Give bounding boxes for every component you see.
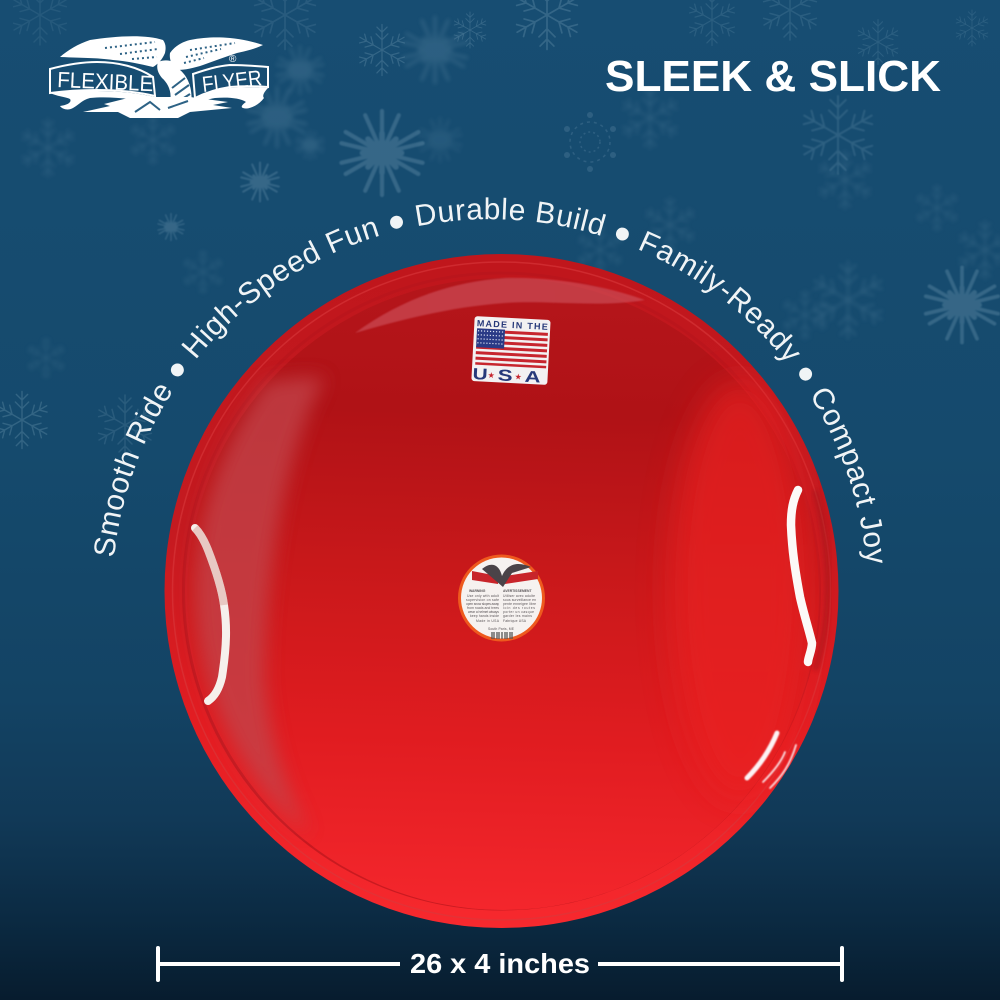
label fine print: wear a helmet always	[468, 610, 499, 614]
right bright shading	[670, 380, 810, 800]
lightning and mountain base	[83, 97, 232, 118]
body stripes	[172, 78, 190, 103]
logo: Flexible Flyer eagle	[50, 36, 268, 118]
sled disc	[164, 254, 838, 928]
base detail	[135, 101, 188, 112]
label fine print: AVERTISSEMENT	[503, 589, 533, 593]
USA lettering: ★	[514, 372, 522, 382]
left rope handle	[195, 528, 226, 701]
USA lettering: A	[524, 369, 542, 387]
label fine print: supervision on safe	[466, 598, 499, 602]
label fine print: garder les mains	[503, 614, 532, 618]
flag	[475, 328, 548, 368]
title: SLEEK & SLICK	[605, 52, 941, 101]
label fine print: Fabrique USA	[503, 619, 527, 623]
warning label	[458, 554, 545, 642]
eagle wings	[60, 36, 263, 70]
upper sheen band	[355, 278, 645, 333]
eagle body	[157, 60, 192, 112]
right banner tail	[190, 87, 268, 109]
made in the USA sticker	[471, 316, 551, 387]
label fine print: keep hands inside	[470, 614, 499, 618]
label fine print: loin des routes	[503, 606, 535, 610]
label fine print: Utiliser avec adulte	[503, 594, 535, 598]
eagle feather speckle	[105, 42, 235, 63]
label fine print: Made in USA	[476, 619, 500, 623]
left banner	[50, 62, 155, 96]
right rim shadow	[815, 490, 828, 670]
lower right glints	[747, 733, 796, 788]
snowflake pattern	[0, 0, 1000, 455]
label fine print: from roads and trees	[467, 606, 499, 610]
label fine print: porter un casque	[503, 610, 534, 614]
label banner	[472, 564, 538, 587]
left banner tail	[50, 91, 157, 109]
registered mark: ®	[229, 54, 237, 65]
sticker heading: MADE IN THE	[477, 318, 548, 332]
right rope handle	[791, 490, 812, 662]
outer rim	[164, 254, 838, 928]
label fine print: sous surveillance en	[503, 598, 536, 602]
label fine print: South Paris, ME	[488, 627, 515, 631]
label fine print: open snow slopes away	[466, 602, 499, 606]
label fine print	[466, 589, 536, 631]
USA lettering: U	[472, 366, 488, 384]
barcode	[492, 632, 512, 639]
logo wordmark flexible: FLEXIBLE	[57, 67, 154, 96]
rim channel	[182, 465, 821, 910]
logo wordmark flyer: FLYER	[201, 65, 263, 97]
dish surface	[187, 278, 819, 910]
label fine print: pente enneigee libre	[503, 602, 536, 606]
label fine print: Use only with adult	[467, 594, 499, 598]
dimension label: 26 x 4 inches	[410, 948, 590, 979]
label fine print: WARNING	[469, 589, 486, 593]
curved feature text: Smooth Ride ● High-Speed Fun ● Durable Build ● Family-Ready ● Compact Joy	[94, 197, 882, 563]
right banner	[193, 65, 268, 98]
rim ridge	[172, 262, 830, 920]
USA lettering: ★	[487, 371, 495, 380]
USA lettering: S	[497, 367, 514, 385]
USA lettering	[472, 366, 542, 387]
dimension line: 26 x 4 inches	[158, 948, 842, 980]
left dull crescent	[195, 377, 325, 835]
